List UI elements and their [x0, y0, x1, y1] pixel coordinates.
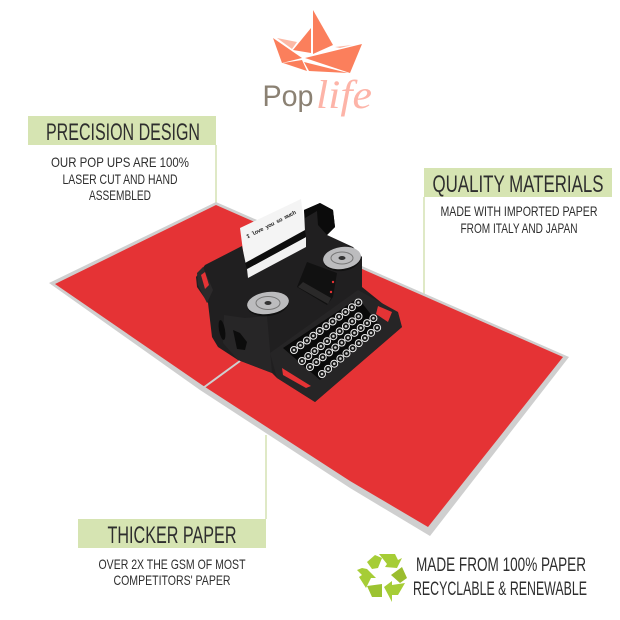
body front face	[223, 315, 272, 373]
typewriter body	[196, 203, 402, 402]
typewriter	[196, 199, 402, 402]
card fold	[203, 361, 240, 388]
keyboard	[270, 290, 402, 402]
heading: PRECISION DESIGN	[46, 119, 200, 146]
connector lines	[216, 145, 424, 519]
body text	[98, 556, 246, 588]
heading band	[28, 116, 216, 145]
left ear	[197, 267, 213, 303]
icon: origami boat	[273, 10, 362, 73]
body text	[440, 203, 598, 236]
logo wordmark: Pop	[262, 80, 314, 113]
paper roller bar	[245, 230, 306, 269]
recycling statement	[413, 554, 587, 600]
body text: COMPETITORS' PAPER	[114, 572, 230, 588]
body text: ASSEMBLED	[89, 187, 151, 203]
card border	[49, 202, 569, 536]
icon: recycle	[357, 554, 407, 602]
card red surface	[55, 205, 563, 527]
callout: quality materials	[424, 168, 612, 236]
left spool	[246, 289, 290, 319]
heading band	[78, 519, 266, 548]
body text: OVER 2X THE GSM OF MOST	[98, 556, 246, 572]
right spool	[322, 244, 362, 274]
key rings	[294, 302, 378, 374]
roller knob	[304, 203, 335, 235]
paper sheet	[240, 199, 305, 266]
body text: LASER CUT AND HAND	[62, 171, 178, 187]
red gaps	[282, 368, 311, 388]
logo	[262, 10, 372, 117]
callout: thicker paper	[78, 519, 266, 588]
heading: THICKER PAPER	[108, 522, 236, 549]
body text: OUR POP UPS ARE 100%	[51, 154, 189, 170]
logo wordmark	[262, 72, 372, 117]
logo wordmark: life	[316, 72, 372, 117]
callout: precision design	[28, 116, 216, 203]
body vents	[217, 320, 247, 350]
heading band	[424, 168, 612, 197]
paper message: I love you so much	[245, 209, 298, 240]
lower paper strip	[247, 237, 306, 278]
body text: FROM ITALY AND JAPAN	[460, 220, 578, 236]
pop-up card	[49, 202, 569, 536]
ribbon well	[297, 262, 337, 305]
body text	[51, 154, 189, 203]
